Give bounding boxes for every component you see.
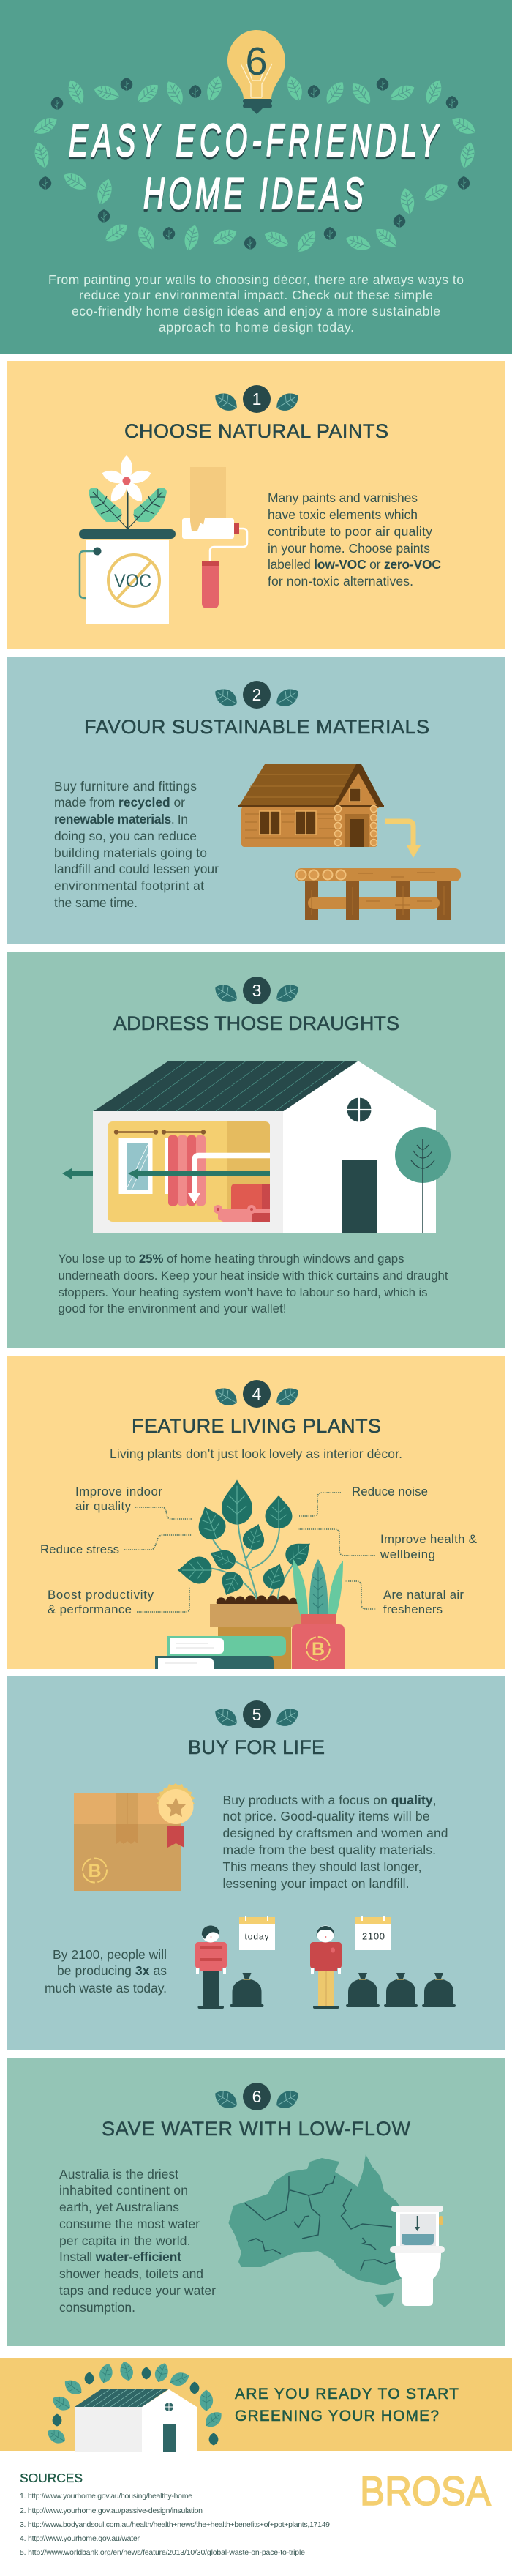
heading: CHOOSE NATURAL PAINTS [124,420,388,442]
sources: SOURCES [20,2471,83,2485]
benefit labels: Reduce noise [352,1485,428,1498]
panel: choose natural paints [7,361,505,649]
body text: stoppers. Your heating system won’t have to labour so hard, which is [59,1285,427,1299]
body text [222,1793,448,1891]
body text: inhabited continent on [59,2183,188,2198]
heading: BUY FOR LIFE [188,1736,325,1758]
benefit labels: fresheners [383,1602,443,1616]
waste stat text: be producing 3x as [57,1963,167,1978]
intro text: approach to home design today. [159,320,354,335]
heading: FAVOUR SUSTAINABLE MATERIALS [84,716,429,738]
icon: light bulb [227,30,285,114]
arrow: warm air deflected by curtains [188,1155,270,1203]
illustration: paint can with flower [79,455,176,624]
leaf arch [45,2360,225,2446]
waste stat text: By 2100, people will [53,1947,167,1962]
arrow [385,821,421,858]
body text: consumption. [59,2300,135,2315]
body text: This means they should last longer, [222,1859,421,1874]
benefit labels: air quality [75,1499,132,1513]
number badge 5: 5 [252,1705,261,1724]
benefit labels: Improve indoor [75,1485,162,1498]
sources: 1. http://www.yourhome.gov.au/housing/healthy-home [20,2492,192,2501]
sources: 3. http://www.bodyandsoul.com.au/health/health+news/the+health+benefits+of+pot+plants,17149 [20,2520,330,2529]
icon: toilet [390,2206,445,2306]
figure: person today [195,1925,227,2009]
body text: designed by craftsmen and women and [222,1826,448,1840]
sources: 2. http://www.yourhome.gov.au/passive-design/insulation [20,2506,203,2515]
number badge 4 [211,1380,302,1410]
body text: made from recycled or [54,795,185,810]
calendar: 2100: 2100 [362,1931,385,1941]
benefit labels: wellbeing [380,1548,435,1561]
figure: person 2100 [310,1925,342,2009]
body text [59,1252,448,1315]
intro line: Living plants don’t just look lovely as interior décor. [110,1446,402,1461]
icon: light bulb: 6 [245,40,268,83]
body text: Install water-efficient [59,2250,181,2264]
body text: underneath doors. Keep your heat inside with thick curtains and draught [59,1269,448,1283]
illustration: log bench [295,868,461,920]
body text: Buy products with a focus on quality, [222,1793,436,1807]
body text: lessening your impact on landfill. [222,1876,410,1891]
three bags of waste [346,1973,456,2007]
heading: ADDRESS THOSE DRAUGHTS [113,1012,399,1034]
benefit labels [40,1485,477,1616]
illustration: bottle with sansevieria [292,1559,345,1669]
panel: buy for life [7,1676,505,2050]
map of Australia [228,2154,424,2307]
body text: Australia is the driest [59,2167,178,2181]
body text: landfill and could lessen your [54,862,219,876]
panel: favour sustainable materials [7,657,505,944]
body text: not price. Good-quality items will be [222,1809,430,1823]
body text [54,779,219,910]
body text: shower heads, toilets and [59,2266,203,2281]
body text: taps and reduce your water [59,2283,216,2298]
calendar: today: today [244,1931,269,1941]
calendar: today [239,1916,275,1950]
number badge 2 [211,681,302,711]
body text: renewable materials. In [54,812,188,826]
panel: feature living plants [7,1356,505,1669]
illustration: house cross-section [93,1061,436,1233]
waste stat text: much waste as today. [45,1981,167,1996]
logo: Brosa: BROSA [360,2468,492,2514]
illustration: quality box [74,1783,195,1891]
body text: per capita in the world. [59,2233,190,2248]
benefit labels: Improve health & [380,1532,477,1546]
arrow: heat lost through window [62,1168,270,1179]
house window and door [342,1097,377,1233]
number badge 3 [211,977,302,1007]
benefit labels: & performance [48,1602,132,1616]
number badge 4: 4 [252,1384,262,1403]
calendar: 2100 [355,1916,391,1950]
icon: tree [395,1127,451,1233]
illustration: paint roller [182,467,247,608]
number badge 6: 6 [252,2087,261,2106]
illustration: log cabin [238,764,384,847]
dotted leader lines [124,1493,376,1612]
number badge 1 [211,385,302,415]
intro text: From painting your walls to choosing décor, there are always ways to [48,272,464,287]
illustration: potted plant [178,1479,317,1669]
body text [59,2167,216,2315]
body text: Many paints and varnishes [268,490,418,505]
illustration: quality box: B [88,1861,102,1881]
intro text [48,272,464,335]
body text: in your home. Choose paints [268,541,430,556]
body text [268,490,441,589]
illustration: bottle with sansevieria: B [312,1639,325,1660]
number badge 2: 2 [252,685,261,704]
body text: Buy furniture and fittings [54,779,197,794]
call to action text: GREENING YOUR HOME? [235,2408,439,2424]
benefit labels: Reduce stress [40,1542,119,1556]
icon: house [75,2389,197,2452]
sources [20,2471,330,2557]
number badge 5 [211,1700,302,1731]
waste stat text [45,1947,167,1996]
body text: have toxic elements which [268,507,418,522]
call to action band [0,2358,512,2452]
illustration: books [155,1636,286,1669]
title: HOME IDEAS [143,169,367,218]
heading: FEATURE LIVING PLANTS [132,1415,381,1437]
body text: consume the most water [59,2217,200,2231]
call to action text [235,2386,459,2424]
header panel [0,0,512,354]
body text: for non-toxic alternatives. [268,574,413,589]
body text: building materials going to [54,845,207,860]
number badge 1: 1 [252,389,261,408]
body text: You lose up to 25% of home heating through windows and gaps [59,1252,404,1266]
body text: environmental footprint at [54,878,204,893]
number badge 3: 3 [252,981,261,1000]
number badge 6 [211,2083,302,2113]
illustration: paint can with flower: VOC [114,571,151,591]
bag of waste [230,1973,263,2007]
benefit labels: Are natural air [383,1588,464,1602]
heading: SAVE WATER WITH LOW-FLOW [102,2118,411,2140]
body text: the same time. [54,895,138,910]
title [69,116,443,218]
sources: 5. http://www.worldbank.org/en/news/feature/2013/10/30/global-waste-on-pace-to-triple [20,2548,305,2557]
sources: 4. http://www.yourhome.gov.au/water [20,2534,140,2543]
intro text: reduce your environmental impact. Check out these simple [79,288,433,302]
panel: address those draughts [7,952,505,1348]
body text: contribute to poor air quality [268,524,432,539]
panel: save water with low-flow [7,2058,505,2346]
body text: doing so, you can reduce [54,829,197,843]
body text: earth, yet Australians [59,2200,179,2214]
benefit labels: Boost productivity [48,1588,154,1602]
call to action text: ARE YOU READY TO START [235,2386,459,2403]
body text: good for the environment and your wallet! [59,1302,287,1315]
leaf wreath [31,74,478,256]
body text: made from the best quality materials. [222,1843,436,1857]
body text: labelled low-VOC or zero-VOC [268,557,441,572]
intro text: eco-friendly home design ideas and enjoy a more sustainable [72,304,440,318]
